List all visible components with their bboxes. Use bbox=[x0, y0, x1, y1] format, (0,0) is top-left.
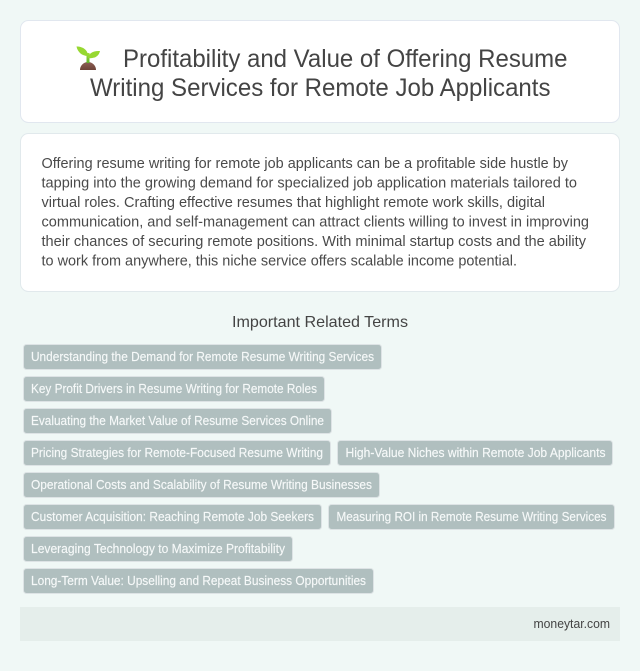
footer bbox=[20, 607, 620, 641]
tag: ROI bbox=[328, 504, 614, 530]
tag: demand: Understanding the Demand for Remote Resume Writing Services bbox=[31, 349, 374, 364]
tag: pricing bbox=[24, 440, 330, 466]
tag: niches bbox=[338, 440, 612, 466]
tag: niches: High-Value Niches within Remote Job Applicants bbox=[346, 445, 606, 460]
text line 1: Offering resume writing for remote job applicants can be a profitable side hustle by bbox=[42, 156, 569, 172]
tag: operational costs bbox=[24, 472, 380, 498]
text line 4: communication, and self-management can attract clients willing to invest in improving bbox=[42, 214, 589, 230]
tag: technology: Leveraging Technology to Maximize Profitability bbox=[31, 541, 285, 556]
tag: technology bbox=[24, 536, 292, 562]
tag: profit drivers: Key Profit Drivers in Resume Writing for Remote Roles bbox=[31, 381, 317, 396]
tag: demand bbox=[24, 344, 382, 370]
tag: profit drivers bbox=[24, 376, 324, 402]
title line 1: Profitability and Value of Offering Resume bbox=[123, 45, 568, 73]
icon: sprout bbox=[76, 46, 100, 70]
tag: operational costs: Operational Costs and Scalability of Resume Writing Businesses bbox=[31, 477, 372, 492]
panel: description bbox=[20, 134, 620, 292]
title line 2: Writing Services for Remote Job Applicants bbox=[90, 74, 550, 102]
heading: related terms: Important Related Terms bbox=[232, 314, 408, 331]
tag: pricing: Pricing Strategies for Remote-Focused Resume Writing bbox=[31, 445, 323, 460]
tag: market value: Evaluating the Market Value of Resume Services Online bbox=[31, 413, 324, 428]
panel: title header bbox=[20, 20, 620, 122]
tag: customer acquisition: Customer Acquisition: Reaching Remote Job Seekers bbox=[31, 509, 314, 524]
footer source text: moneytar.com bbox=[534, 616, 610, 631]
tag: long-term value: Long-Term Value: Upselling and Repeat Business Opportunities bbox=[31, 573, 366, 588]
text line 5: their chances of securing remote positions. With minimal startup costs and the ability bbox=[42, 234, 587, 250]
text line 6: to work from anywhere, this niche service offers scalable income potential. bbox=[42, 254, 517, 270]
text line 2: tapping into the growing demand for specialized job application materials tailored to bbox=[42, 176, 577, 192]
tag: market value bbox=[24, 408, 332, 434]
text line 3: virtual roles. Crafting effective resumes that highlight remote work skills, digital bbox=[42, 195, 545, 211]
tag: long-term value bbox=[24, 568, 374, 594]
tag: ROI: Measuring ROI in Remote Resume Writing Services bbox=[336, 509, 607, 524]
tag: customer acquisition bbox=[24, 504, 322, 530]
